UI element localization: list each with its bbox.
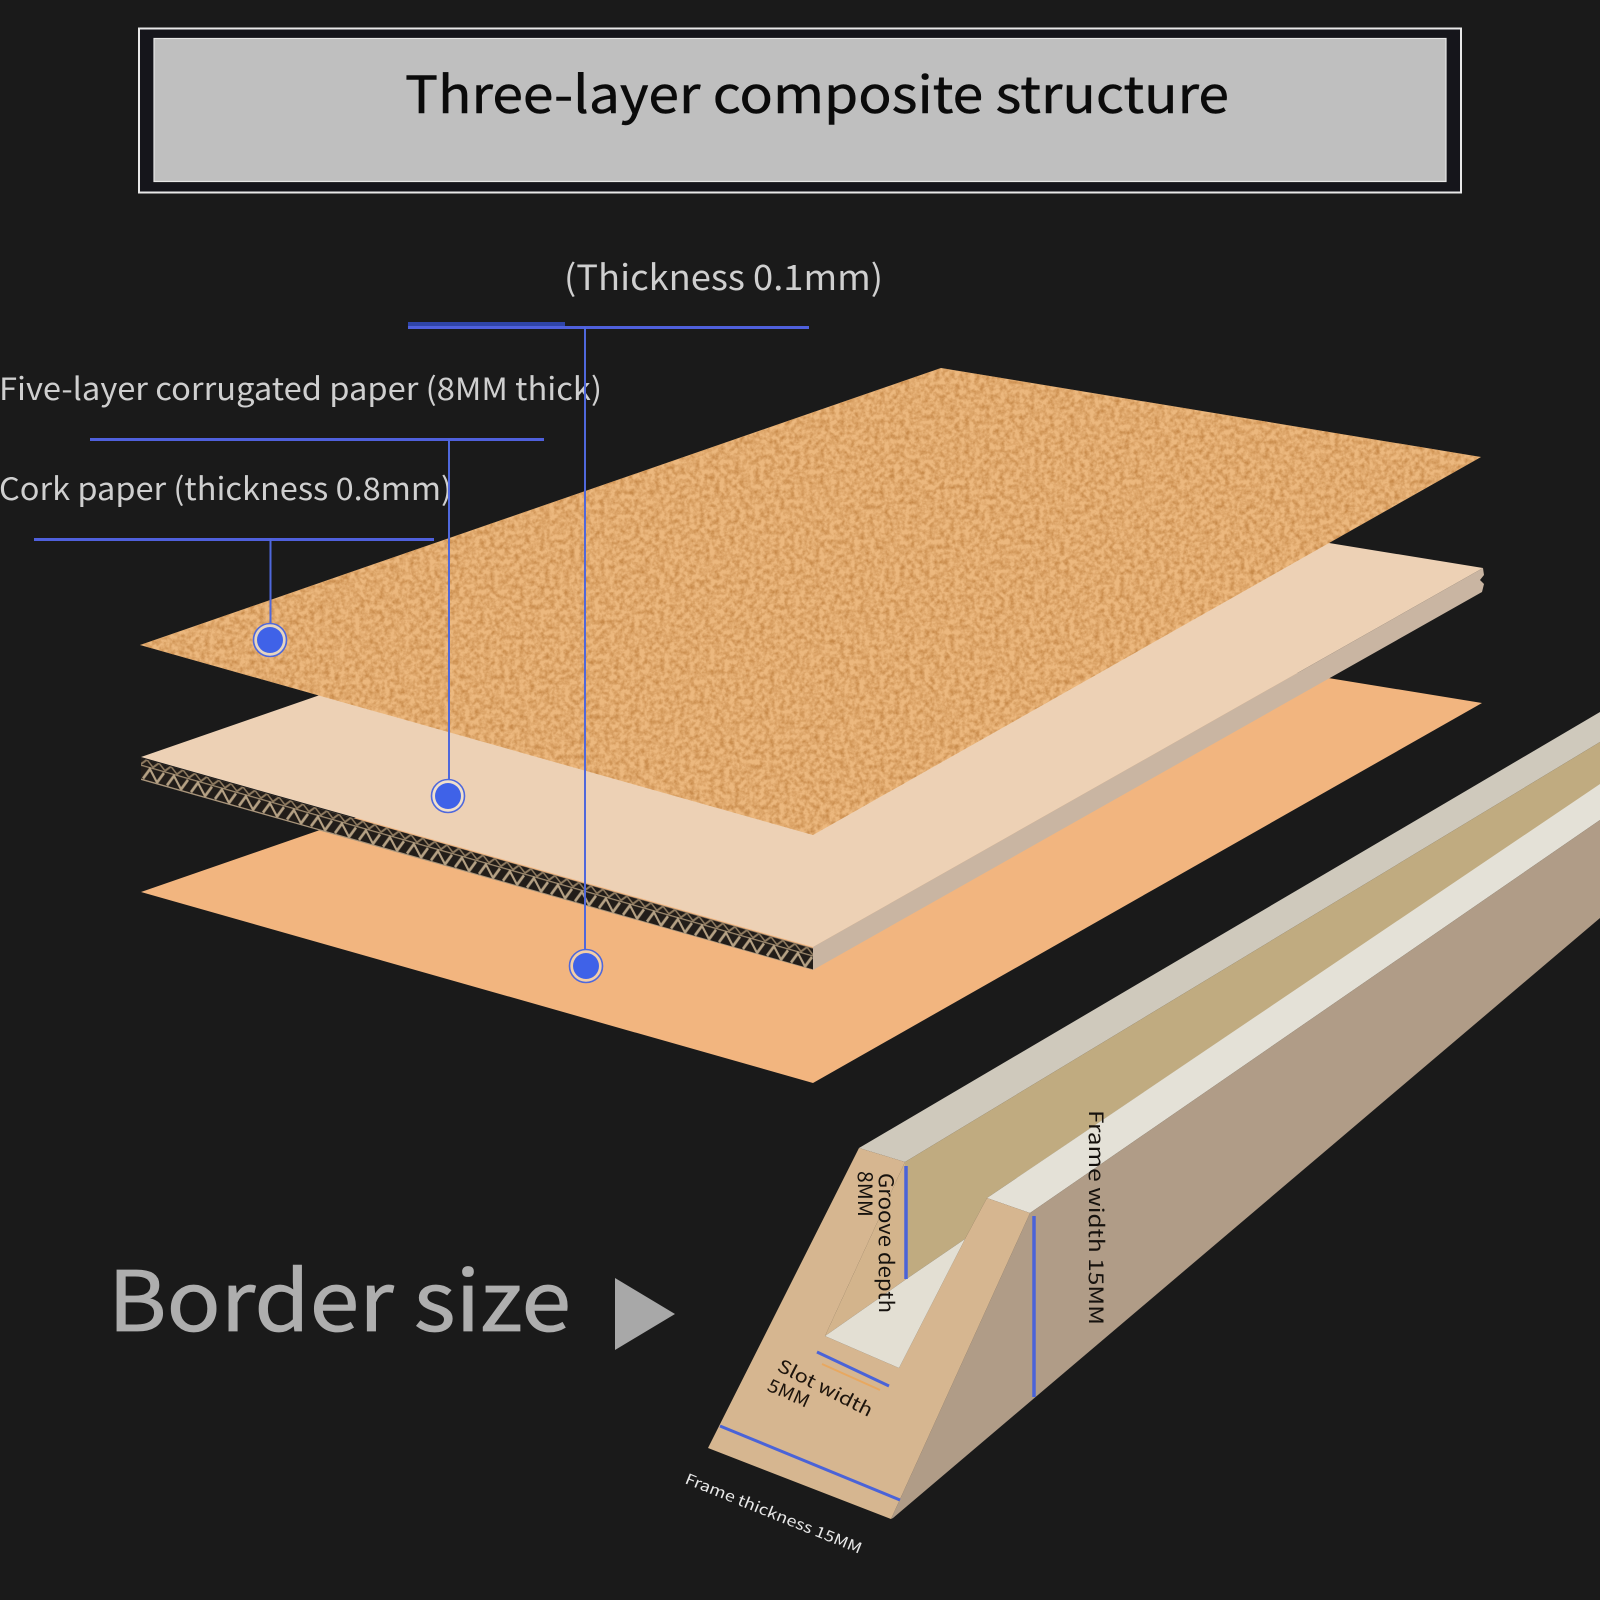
middle sheet: five-layer corrugated paper [141, 480, 1484, 970]
label: cork paper: Cork paper (thickness 0.8mm) [0, 464, 452, 509]
label: slot width: 5MM [764, 1372, 814, 1413]
title text: Three-layer composite structure [405, 54, 1229, 128]
slot width marker [817, 1352, 889, 1386]
label: five-layer corrugated paper [0, 364, 602, 441]
callout: corrugated pointer [432, 439, 464, 812]
frame groove wall [905, 742, 1600, 1280]
frame front face [708, 1148, 1030, 1519]
title banner [139, 28, 1461, 192]
label: frame thickness: Frame thickness 15MM [682, 1468, 865, 1558]
corrugated front flutes [141, 758, 813, 970]
slot inner wall [825, 1162, 905, 1336]
frame ledge [987, 784, 1600, 1213]
label: slot width: Slot width [773, 1352, 878, 1423]
label: groove depth [852, 1171, 902, 1313]
bottom sheet: kraft paper [141, 615, 1482, 1083]
frame width marker [1032, 1216, 1036, 1397]
label: groove depth: Groove depth [873, 1173, 902, 1313]
label: frame width: Frame width 15MM [1083, 1110, 1112, 1325]
label: groove depth: 8MM [852, 1171, 881, 1217]
frame profile diagram [682, 712, 1600, 1558]
arrow: pointing to frame [615, 1278, 675, 1350]
corrugated right side face [813, 568, 1484, 970]
label: thickness 0.1mm [408, 250, 883, 329]
heading: border size: Border size [108, 1235, 571, 1355]
frame top strip [859, 712, 1600, 1162]
corrugated top surface [141, 480, 1483, 947]
slot floor [825, 1239, 965, 1368]
top sheet: cork paper [140, 368, 1481, 835]
callout: cork pointer [254, 539, 286, 656]
callout: thin layer pointer [570, 327, 602, 982]
label: five-layer corrugated paper: Five-layer corrugated paper (8MM thick) [0, 364, 602, 409]
slot width underline [822, 1364, 880, 1390]
frame thickness marker [720, 1426, 900, 1500]
label: slot width [764, 1352, 878, 1423]
frame side face [891, 820, 1600, 1519]
label: thickness 0.1mm: (Thickness 0.1mm) [564, 250, 883, 301]
label: cork paper [0, 464, 452, 541]
groove depth marker [904, 1166, 908, 1279]
